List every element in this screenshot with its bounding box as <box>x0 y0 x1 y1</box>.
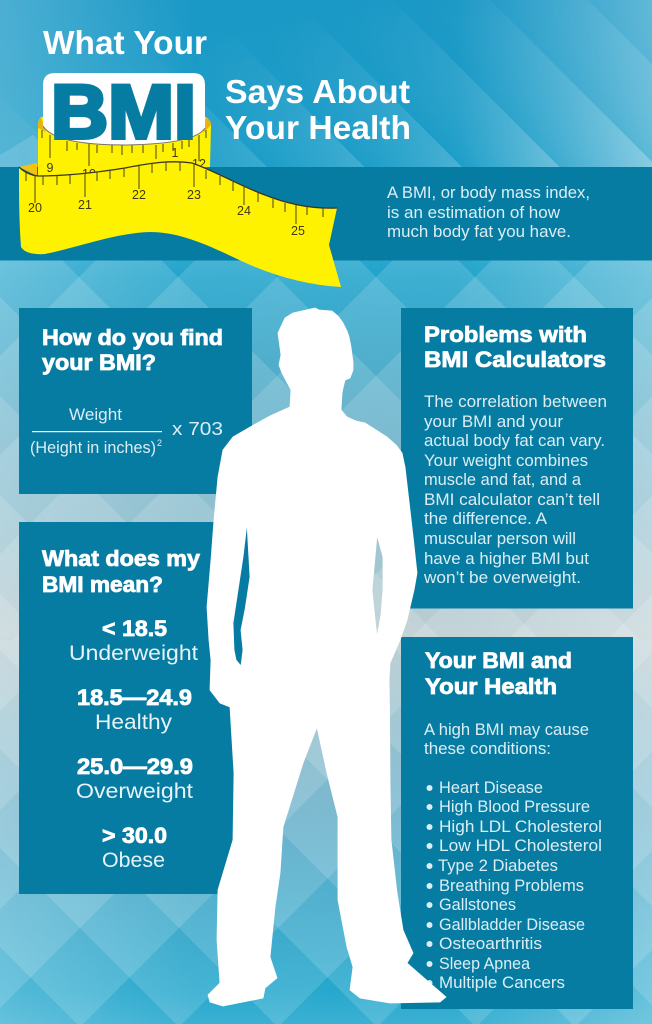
conditions list: Sleep Apnea <box>439 955 531 973</box>
category: overweight <box>76 754 193 803</box>
intro text <box>387 184 590 241</box>
body text: muscle and fat, and a <box>424 471 582 489</box>
heading: your BMI? <box>42 350 156 375</box>
category: obese: > 30.0 <box>102 823 167 848</box>
conditions list: High LDL Cholesterol <box>439 818 602 836</box>
body text: the difference. A <box>424 510 547 528</box>
measuring tape, front band: 22 <box>132 188 146 202</box>
category: overweight: 25.0—29.9 <box>77 754 193 779</box>
heading: BMI mean? <box>42 572 163 597</box>
heading: BMI Calculators <box>424 347 606 372</box>
category: healthy: Healthy <box>95 710 172 734</box>
category: obese <box>102 823 167 872</box>
heading: Problems with <box>424 322 587 347</box>
measuring tape, front band: 23 <box>187 188 201 202</box>
heading: Your Health <box>425 674 557 699</box>
body text: won’t be overweight. <box>423 569 581 587</box>
heading <box>42 546 201 597</box>
conditions list: Gallbladder Disease <box>439 916 585 934</box>
measuring tape, back loop: 10 <box>82 167 96 181</box>
conditions list: Multiple Cancers <box>439 974 565 992</box>
lead-in text: these conditions: <box>424 740 551 758</box>
conditions list <box>426 779 602 992</box>
heading <box>425 648 572 699</box>
category: underweight: < 18.5 <box>102 616 167 641</box>
panel: how do you find your BMI <box>19 308 252 494</box>
category: healthy <box>77 685 192 734</box>
panel: what does my BMI mean <box>19 522 252 894</box>
heading <box>42 325 223 375</box>
intro text: A BMI, or body mass index, <box>387 184 590 202</box>
body text: your BMI and your <box>424 413 564 431</box>
body text: muscular person will <box>424 530 576 548</box>
lead-in text: A high BMI may cause <box>424 721 589 739</box>
heading: What does my <box>42 546 201 571</box>
lead-in text <box>424 721 589 758</box>
BMI formula: x 703 <box>172 418 223 439</box>
category: underweight: Underweight <box>69 641 198 665</box>
measuring tape, back loop: 1 <box>172 146 179 160</box>
heading <box>424 322 606 372</box>
panel: problems with BMI calculators <box>401 308 633 608</box>
body text: The correlation between <box>424 393 607 411</box>
body text: BMI calculator can’t tell <box>424 491 600 509</box>
conditions list: Heart Disease <box>439 779 543 797</box>
body text: Your weight combines <box>424 452 588 470</box>
intro text: much body fat you have. <box>387 223 571 241</box>
conditions list: Gallstones <box>439 896 516 914</box>
body text: actual body fat can vary. <box>424 432 605 450</box>
conditions list: Breathing Problems <box>439 877 584 895</box>
intro text: is an estimation of how <box>387 204 560 222</box>
title: Says About Your Health: Says About <box>225 73 410 110</box>
BMI formula: Weight <box>69 406 122 424</box>
heading: How do you find <box>42 325 223 350</box>
BMI logo badge: BMI <box>51 70 196 155</box>
measuring tape, front band: 24 <box>237 204 251 218</box>
measuring tape, back loop <box>38 117 211 181</box>
category: underweight <box>69 616 198 665</box>
BMI formula: 2 <box>157 438 162 448</box>
conditions list: High Blood Pressure <box>439 798 590 816</box>
body text: have a higher BMI but <box>424 550 589 568</box>
category: overweight: Overweight <box>76 779 193 803</box>
silhouette of a man <box>207 308 446 1006</box>
conditions list: Type 2 Diabetes <box>438 857 558 875</box>
category: obese: Obese <box>102 848 165 872</box>
conditions list: Osteoarthritis <box>439 935 542 953</box>
BMI formula <box>30 406 223 457</box>
conditions list: Low HDL Cholesterol <box>439 837 602 855</box>
heading: Your BMI and <box>425 648 572 673</box>
measuring tape, back loop: 12 <box>192 157 206 171</box>
measuring tape, front band <box>19 162 341 287</box>
measuring tape, front band: 21 <box>78 198 92 212</box>
title: Says About Your Health <box>225 73 411 146</box>
title: What Your: What Your <box>43 24 207 61</box>
panel: your BMI and your health <box>401 637 633 1009</box>
title: Says About Your Health: Your Health <box>225 109 411 146</box>
measuring tape, front band: 20 <box>28 201 42 215</box>
BMI formula: (Height in inches) <box>30 439 156 457</box>
body text <box>423 393 607 587</box>
measuring tape, front band: 25 <box>291 224 305 238</box>
intro band <box>0 167 652 260</box>
measuring tape, back loop: 9 <box>47 161 54 175</box>
category: healthy: 18.5—24.9 <box>77 685 192 710</box>
